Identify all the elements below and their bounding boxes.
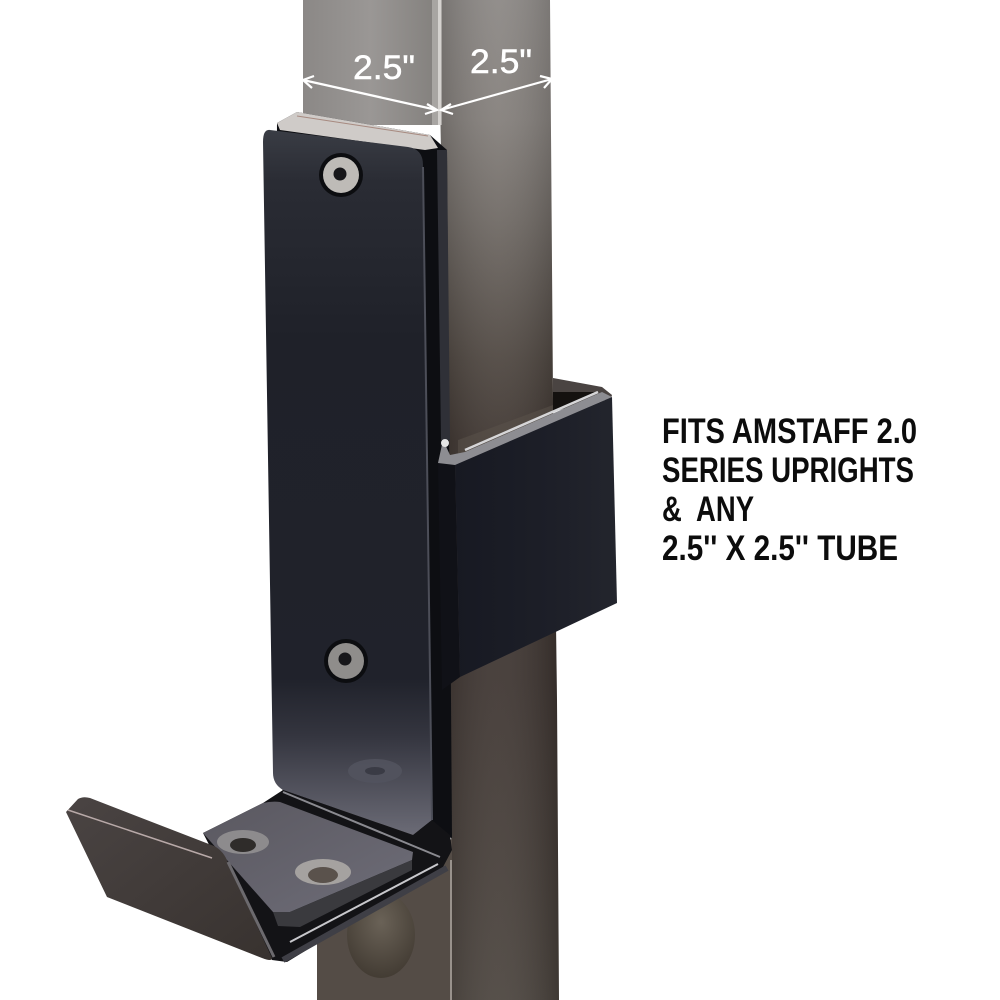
dimension arrow: right face [441, 76, 552, 114]
fit description: 2.5'' X 2.5'' TUBE [662, 529, 898, 568]
fit description: & ANY [662, 490, 754, 529]
hook base and shelf [203, 790, 452, 962]
bottom bolt [324, 639, 368, 683]
top bolt [319, 153, 363, 197]
square tube upright [300, 0, 559, 1000]
dimension label: left: 2.5" [353, 49, 415, 87]
fit description: SERIES UPRIGHTS [662, 451, 914, 490]
shelf bolts [217, 830, 351, 885]
J-cup sleeve bracket [438, 378, 617, 690]
tube mounting hole [347, 892, 415, 978]
dimension label: right: 2.5" [470, 43, 532, 81]
hook lip [66, 797, 274, 960]
dimension arrow: left face [303, 76, 437, 114]
fit description [662, 412, 917, 568]
fit description: FITS AMSTAFF 2.0 [662, 412, 917, 451]
mounting plate [263, 112, 452, 838]
